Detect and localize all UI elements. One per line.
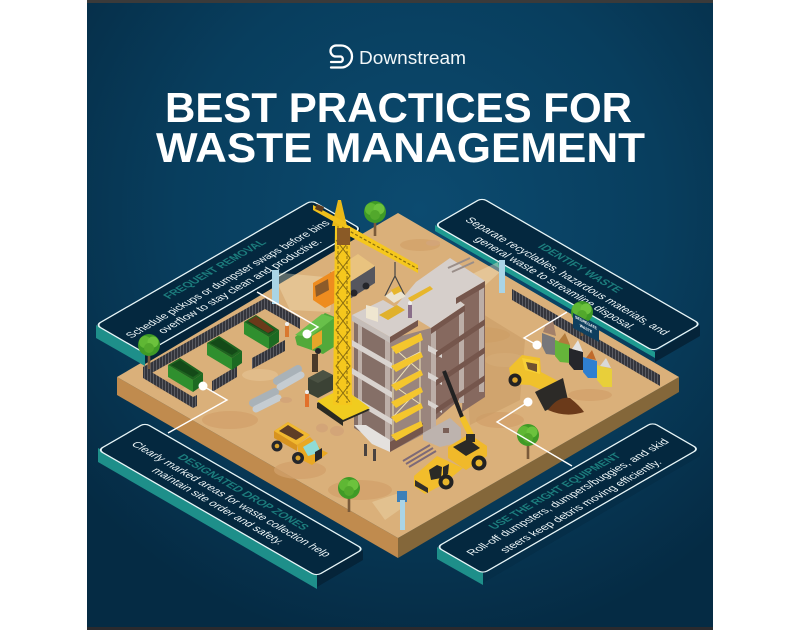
body text: Roll-off dumpsters, dumpers/buggies, and skid (464, 437, 672, 558)
brand name: Downstream (359, 48, 466, 68)
roof slab (352, 258, 485, 337)
stairs and base (354, 425, 390, 452)
lamp posts and light beams (272, 260, 505, 530)
orange truck (313, 254, 375, 308)
tower crane (313, 200, 418, 426)
bucket (535, 378, 568, 411)
green garbage truck (295, 313, 337, 372)
building shadow (460, 300, 525, 425)
icon: Downstream mark (330, 46, 352, 68)
building (352, 258, 485, 467)
logo (330, 46, 466, 68)
yellow dump truck (272, 422, 328, 465)
construction site platform (117, 213, 679, 558)
apex (332, 200, 347, 226)
panel: identify waste (435, 198, 700, 362)
jib (342, 222, 418, 273)
dumpsters (168, 315, 279, 392)
workers (285, 301, 412, 461)
connector: identify waste (524, 312, 567, 350)
background panel (87, 0, 713, 630)
title: BEST PRACTICES FOR (165, 84, 632, 131)
recycling bins (542, 313, 612, 387)
scaffolding (391, 333, 423, 441)
panel: frequent removal (96, 200, 361, 366)
hook and load (385, 262, 405, 296)
body text: general waste to streamline disposal. (471, 235, 638, 332)
pipes (253, 369, 301, 409)
wheel loader (508, 355, 584, 415)
body text: maintain site order and safety. (148, 466, 287, 547)
connector: frequent removal (257, 292, 318, 338)
sign: SEGREGATE (575, 314, 597, 331)
body text: Clearly marked areas for waste collection help (128, 440, 333, 559)
heading: USE THE RIGHT EQUIPMENT (487, 452, 624, 531)
body text: steers keep debris moving efficiently. (498, 458, 665, 555)
connector: designated drop zones (168, 382, 227, 433)
heading: FREQUENT REMOVAL (161, 238, 270, 301)
crane arm vehicle (414, 371, 487, 494)
trees (138, 201, 593, 512)
counter jib (313, 205, 345, 228)
material block (308, 370, 333, 398)
panel: use the right equipment (437, 422, 700, 585)
mast (333, 226, 352, 405)
body text: Schedule pickups or dumpster swaps before bins (124, 219, 333, 340)
panel: designated drop zones (98, 423, 363, 589)
title (156, 84, 645, 171)
connector: use the right equipment (497, 398, 572, 466)
heading: IDENTIFY WASTE (535, 242, 625, 295)
body text: overflow to stay clean and productive. (156, 237, 325, 336)
sign: WASTE (580, 323, 593, 334)
fences (143, 289, 660, 408)
body text: Separate recyclables, hazardous materials, and (462, 216, 671, 337)
dirt pile (548, 398, 584, 415)
dirt piles (280, 240, 440, 436)
sign (573, 313, 599, 342)
base (317, 390, 370, 426)
heading: DESIGNATED DROP ZONES (174, 453, 311, 532)
title: WASTE MANAGEMENT (156, 124, 645, 171)
